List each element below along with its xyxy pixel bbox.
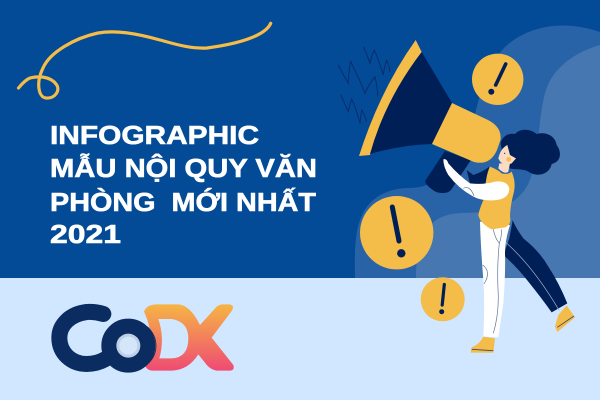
sound scribbles bbox=[338, 47, 390, 123]
front shoe bbox=[471, 337, 495, 353]
logo o centre bbox=[116, 334, 140, 358]
title: 2021 bbox=[50, 219, 121, 249]
swoosh curl bbox=[18, 23, 271, 98]
icon: megaphone bbox=[359, 40, 501, 193]
back shoe bbox=[555, 305, 575, 332]
logo letter C bbox=[59, 312, 105, 364]
yellow top bbox=[478, 167, 515, 229]
neck bbox=[498, 163, 510, 173]
blue header background bbox=[0, 0, 600, 279]
front arm bbox=[443, 159, 509, 200]
background blob: mid blue bbox=[355, 25, 600, 278]
title: MẪU NỘI QUY VĂN bbox=[50, 153, 317, 183]
front leg bbox=[480, 222, 510, 337]
face bbox=[498, 145, 516, 165]
megaphone body bbox=[432, 103, 501, 163]
background blob: light blue bbox=[416, 45, 600, 278]
back leg bbox=[503, 220, 567, 312]
logo outline arc bbox=[145, 327, 156, 366]
logo letter o bbox=[109, 326, 148, 365]
logo: CoDX bbox=[59, 304, 234, 371]
upper body bbox=[443, 130, 560, 229]
icon: alert large bbox=[360, 196, 433, 269]
legs bbox=[471, 220, 575, 353]
icon: alert top bbox=[472, 54, 523, 105]
illustration: woman bbox=[443, 130, 575, 353]
megaphone handle bbox=[425, 151, 471, 193]
megaphone cone bbox=[370, 52, 452, 154]
title: INFOGRAPHIC bbox=[50, 120, 259, 150]
megaphone rim bbox=[359, 40, 422, 156]
hair bbox=[501, 130, 560, 175]
title: PHÒNG MỚI NHẤT bbox=[50, 187, 316, 217]
back arm bbox=[467, 167, 489, 187]
title bbox=[50, 120, 317, 249]
icon: alert small bbox=[421, 277, 465, 321]
light footer background bbox=[0, 278, 600, 400]
logo letters DX bbox=[144, 304, 234, 371]
